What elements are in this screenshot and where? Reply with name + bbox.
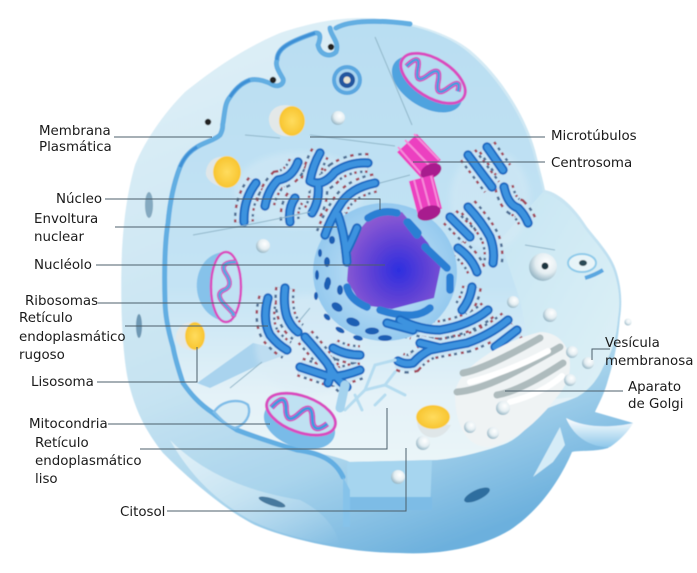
label: Vesícula membranosa: Vesícula xyxy=(605,335,660,351)
notch panel lower right xyxy=(533,427,565,477)
pale zones around rough ER xyxy=(235,150,530,395)
vesicle indent right xyxy=(568,254,603,278)
label: Microtúbulos: Microtúbulos xyxy=(551,128,637,144)
label: Vesícula membranosa xyxy=(592,335,693,369)
nucleus body xyxy=(313,203,457,341)
label: Núcleo xyxy=(56,191,380,210)
golgi apparatus xyxy=(455,332,570,447)
membrane inner shadow, upper left xyxy=(180,33,315,167)
label: Envoltura nuclear: nuclear xyxy=(34,230,85,245)
label: Aparato de Golgi xyxy=(505,380,684,412)
vesicles xyxy=(256,111,632,484)
label: Núcleo: Núcleo xyxy=(56,191,102,207)
label: Citosol xyxy=(120,448,406,520)
label: Membrana Plasmática: Membrana xyxy=(39,124,111,139)
plasma membrane xyxy=(165,21,410,477)
label: Envoltura nuclear: Envoltura xyxy=(34,212,98,227)
wedge in cytoplasm xyxy=(197,343,293,388)
label: Citosol: Citosol xyxy=(120,505,165,520)
rough endoplasmic reticulum ribosomes xyxy=(244,147,528,387)
golgi body xyxy=(455,332,570,447)
label: Retículo endoplasmático rugoso xyxy=(19,310,268,363)
label: Aparato de Golgi: Aparato xyxy=(628,380,681,395)
label: Lisosoma: Lisosoma xyxy=(31,375,94,390)
lysosomes xyxy=(176,105,451,437)
mitochondrion: upper right xyxy=(382,40,475,124)
label: Membrana Plasmática: Plasmática xyxy=(39,139,112,155)
label: Retículo endoplasmático rugoso: rugoso xyxy=(19,348,65,363)
nucleolus xyxy=(347,212,441,309)
lower left highlight on outer surface xyxy=(170,440,340,545)
bottom surface band xyxy=(350,497,432,510)
label: Retículo endoplasmático liso: Retículo xyxy=(35,435,89,451)
label: Retículo endoplasmático liso xyxy=(35,408,387,487)
vesicle indent lower left xyxy=(214,401,249,428)
nuclear pores xyxy=(314,236,392,342)
label: Envoltura nuclear xyxy=(34,212,337,245)
label: Centrosoma: Centrosoma xyxy=(551,156,632,171)
cut panel below cytoplasm xyxy=(347,460,432,510)
small dark beads xyxy=(205,44,334,125)
golgi cisternae xyxy=(457,338,563,395)
centrosome xyxy=(398,134,444,223)
label: Retículo endoplasmático liso: endoplasmático xyxy=(35,453,142,469)
nucleus xyxy=(313,203,457,342)
label: Membrana Plasmática xyxy=(39,124,212,155)
label: Vesícula membranosa: membranosa xyxy=(605,354,693,369)
endocytic vesicle with ring xyxy=(332,65,362,95)
cytoplasm cut surface xyxy=(165,20,619,462)
membrane fold at bottom xyxy=(343,477,350,527)
nuclear envelope segments xyxy=(347,212,450,315)
smooth endoplasmic reticulum xyxy=(340,360,405,410)
label: Lisosoma xyxy=(31,347,197,390)
label: Retículo endoplasmático liso: liso xyxy=(35,472,58,487)
rough endoplasmic reticulum xyxy=(244,147,528,387)
label: Retículo endoplasmático rugoso: Retículo xyxy=(19,310,73,326)
mitochondrion: bottom xyxy=(256,385,344,459)
mitochondrion: left xyxy=(197,252,241,322)
vesicle sphere right xyxy=(529,253,557,281)
label: Aparato de Golgi: de Golgi xyxy=(628,397,684,412)
label: Mitocondria: Mitocondria xyxy=(29,417,108,432)
label: Retículo endoplasmático rugoso: endoplasmático xyxy=(19,329,126,345)
label: Nucléolo: Nucléolo xyxy=(34,257,92,273)
outer pits xyxy=(136,192,492,510)
cell outer body xyxy=(121,18,633,553)
illustration: animal cell xyxy=(121,18,633,553)
right lobe of cytoplasm xyxy=(500,192,619,400)
microtubule fibres xyxy=(193,37,555,388)
flap on right edge xyxy=(566,418,633,447)
label: Ribosomas: Ribosomas xyxy=(25,294,98,309)
